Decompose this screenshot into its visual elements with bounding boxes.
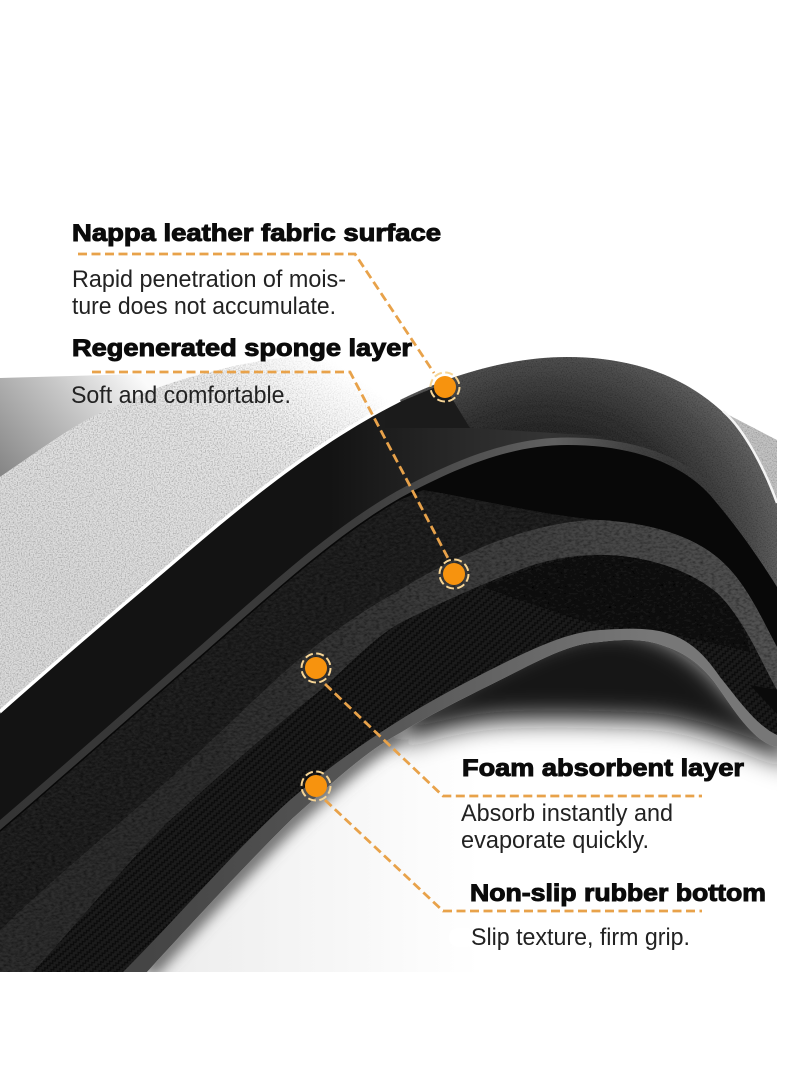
description: ture does not accumulate. bbox=[72, 293, 336, 320]
dark inner wedge bbox=[483, 555, 750, 652]
infographic canvas bbox=[0, 223, 777, 972]
floor below the mat bbox=[147, 640, 777, 972]
marker dot bbox=[302, 772, 330, 800]
leader line bbox=[92, 372, 449, 560]
black wedge at right edge bbox=[750, 685, 777, 714]
description: Soft and comfortable. bbox=[71, 382, 291, 409]
marker dot bbox=[430, 372, 460, 402]
description: evaporate quickly. bbox=[461, 827, 649, 854]
fabric white edge highlight bbox=[0, 400, 400, 712]
description: Absorb instantly and bbox=[461, 800, 673, 827]
panel: nappa leather fabric surface bbox=[0, 428, 72, 477]
product cross-section illustration bbox=[0, 354, 800, 972]
leader line bbox=[325, 684, 702, 796]
callout: foam absorbent layer bbox=[302, 654, 744, 854]
callout: nappa leather fabric surface bbox=[72, 220, 460, 402]
regenerated sponge gray strip bbox=[0, 445, 710, 830]
marker dot bbox=[302, 654, 330, 682]
foam absorbent lighter layer bbox=[0, 520, 777, 972]
heading: Non-slip rubber bottom bbox=[470, 880, 766, 907]
cast shadow under mat bbox=[147, 624, 800, 972]
back of mat, right side bbox=[729, 415, 777, 499]
back of mat, left side bbox=[0, 374, 146, 477]
dark wedge at fabric end bbox=[396, 388, 470, 428]
callout: non-slip rubber bottom bbox=[302, 772, 766, 951]
marker dot bbox=[440, 560, 468, 588]
heading: Foam absorbent layer bbox=[462, 755, 744, 782]
white patch behind caption bbox=[449, 928, 475, 947]
rubber bottom edge strip bbox=[123, 629, 777, 972]
black band under fabric bbox=[0, 384, 620, 840]
leader line bbox=[325, 800, 702, 911]
foam absorbent dark layer bbox=[0, 490, 596, 930]
right white edge highlight bbox=[723, 411, 777, 503]
fabric grain texture bbox=[0, 356, 378, 709]
black inner band bbox=[0, 445, 777, 832]
heading: Nappa leather fabric surface bbox=[72, 220, 441, 247]
leader line bbox=[78, 254, 434, 373]
description: Rapid penetration of mois- bbox=[72, 266, 346, 293]
top layer dark upper surface bbox=[0, 357, 777, 714]
non-slip knit layer bbox=[33, 555, 777, 972]
heading: Regenerated sponge layer bbox=[72, 335, 412, 362]
description: Slip texture, firm grip. bbox=[471, 924, 690, 951]
callout: regenerated sponge layer bbox=[71, 335, 468, 588]
